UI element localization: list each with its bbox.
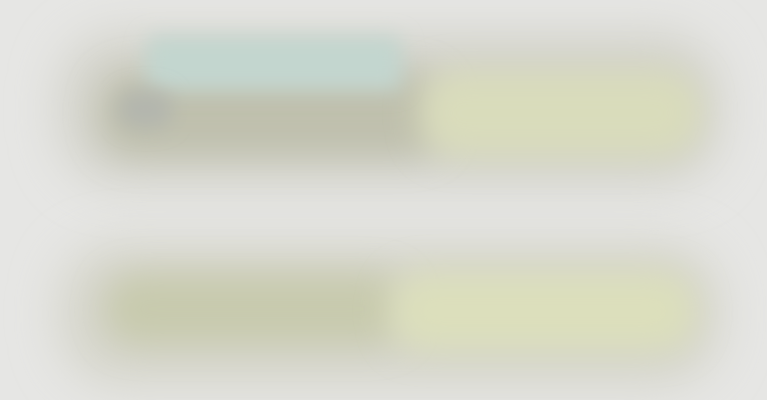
top band teal header	[146, 36, 402, 90]
top band dark left spot	[118, 90, 173, 128]
panel: bottom band	[60, 244, 720, 384]
panel: top band	[60, 34, 720, 184]
